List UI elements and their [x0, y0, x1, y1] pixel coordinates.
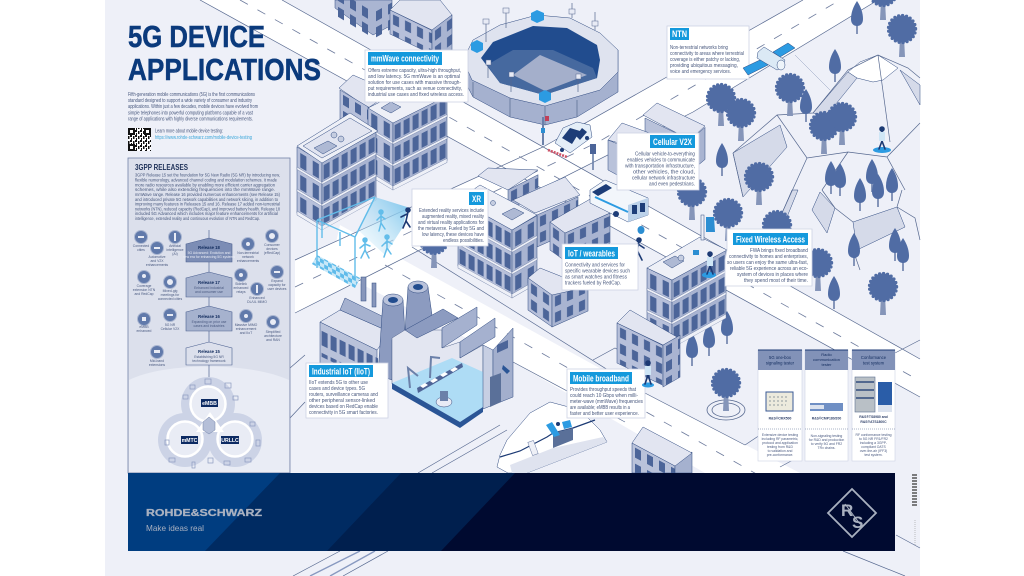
release feature icons: 5G NR: [165, 323, 176, 327]
release 15: Release 15: [198, 349, 220, 354]
text: Mobile broadband description: are available; eMBB results in a: [570, 405, 630, 411]
heading: XR: XR: [472, 194, 481, 204]
heading: mmWave connectivity: mmWave connectivity: [371, 54, 439, 64]
release 15: [186, 342, 232, 365]
release feature icons: Consumer: [264, 243, 281, 247]
heading: 3GPP releases: 3GPP RELEASES: [135, 163, 189, 172]
text: mmWave description: put requirements, such as venue connectivity,: [368, 86, 462, 92]
release feature icons: extensions: [149, 363, 165, 367]
release 18: Release 18: [198, 245, 220, 250]
release feature icons: enhanced: [234, 286, 249, 290]
text: XR description: and virtual reality applications for: [418, 220, 484, 226]
XR scene: [312, 197, 410, 288]
text: IIoT description: other peripheral sensor-linked: [309, 398, 375, 404]
release feature icons: Mid-band: [150, 359, 164, 363]
release 17: [186, 272, 232, 297]
release feature icons: and IIoT: [240, 331, 252, 335]
release feature icons: network: [242, 255, 254, 259]
release 15: Establishing 5G NR: [194, 355, 224, 359]
barcode: [912, 475, 917, 545]
release feature icons: Massive MIMO: [235, 323, 258, 327]
heading: NTN: NTN: [672, 29, 687, 39]
release 15: technology framework: [192, 359, 226, 363]
text: IIoT description: cases and device types. 5G: [309, 386, 365, 392]
column: conformance test system: over-the-air (IFF3): [860, 449, 887, 453]
mountains: [733, 55, 920, 330]
label: URLLC: URLLC: [221, 438, 239, 444]
text: FWA description: so users can enjoy the same ultra-fast,: [727, 260, 808, 266]
banner: [128, 473, 895, 551]
logo: [828, 489, 876, 537]
text: mmWave description: industrial use cases and fixed wireless access.: [368, 92, 464, 98]
release feature icons: Artificial: [169, 244, 181, 248]
release feature icons: user devices: [267, 287, 287, 291]
column: radio communication tester: R&S®CMP180/200: [812, 416, 841, 420]
wireless antenna and people: [630, 127, 891, 278]
text: releases overview: schemes, while also extending frequencies into the mmWave range.: [135, 187, 275, 193]
text: Cellular V2X description: [625, 152, 695, 188]
text: FWA description: FWA brings fixed broadband: [750, 248, 808, 254]
text: NTN description: coverage is either patchy or lacking,: [670, 57, 740, 63]
release feature icons: enhanced: [137, 329, 152, 333]
release 18: new era for enhancing 5G systems: [183, 255, 235, 259]
text: releases overview: 3GPP Release 15 set the foundation for 5G New Radio (5G NR) by introducing new,: [135, 172, 280, 178]
release feature icons: and RedCap: [134, 292, 154, 296]
heading: Industrial IoT: Industrial IoT (IIoT): [312, 366, 370, 376]
release feature icons: Mixed-gig: [163, 289, 177, 293]
callout: NTN: [667, 26, 749, 79]
column: radio communication tester: to verify 5G and FR2: [811, 442, 842, 446]
column: conformance test system: Conformance: [861, 355, 887, 360]
text: FWA description: they spend most of their time.: [744, 278, 808, 284]
column: conformance test system: R&S®ATS1800C: [860, 420, 887, 424]
release feature icons: extension NTN: [133, 288, 156, 292]
callout: Cellular V2X: [617, 133, 699, 190]
text: Mobile broadband description: could reach 10 Gbps when milli-: [570, 393, 638, 399]
label: eMBB: eMBB: [202, 401, 217, 407]
callout: XR: [412, 189, 488, 246]
text: IoT description: specific wearable devices such: [565, 268, 630, 274]
release feature icons: Expand: [271, 279, 283, 283]
release feature icons: relays: [236, 290, 246, 294]
link text: Learn more about mobile device testing:: [155, 128, 223, 134]
text: releases overview: improving many features in Releases 15 and 16. Release 17 added non-terrestrial: [135, 202, 280, 208]
text: Cellular V2X description: cellular network infrastructure: [632, 176, 695, 182]
text: releases overview: and introduced private 5G network capabilities and network slicing, in addition to: [135, 197, 278, 203]
text: NTN description: voice and emergency services.: [670, 69, 731, 75]
text: Cellular V2X description: enables vehicles to communicate: [627, 158, 695, 164]
release feature icons: Cellular V2X: [161, 327, 180, 331]
text: releases overview: included 5G Advanced which includes major feature enhancements for artificial: [135, 211, 278, 217]
text: IIoT description: connectivity in 5G smart factories.: [309, 410, 378, 416]
column: radio communication tester: communication: [813, 357, 840, 362]
column: conformance test system: [852, 350, 895, 461]
factory: [320, 277, 513, 428]
text: mmWave description: and low latency. 5G mmWave is an optimal: [368, 74, 460, 80]
text: releases overview: intelligence, extended reality and continuous evolution of NTN and RedCap.: [135, 216, 260, 222]
text: IoT description: Connectivity and services for: [565, 262, 625, 268]
text: Mobile broadband description: meter-wave (mmWave) frequencies: [570, 399, 643, 405]
release feature icons: architecture: [264, 334, 282, 338]
release 17: Enhanced industrial: [194, 286, 224, 290]
text: mmWave description: [368, 68, 464, 98]
car and traffic lights: [541, 116, 596, 170]
release feature icons: (eRedCap): [264, 251, 280, 255]
text: FWA description: system of devices in places where: [737, 272, 808, 278]
satellite: [743, 43, 830, 90]
release 16: cases and industries: [194, 324, 225, 328]
high speed train: [293, 402, 607, 576]
column: 5G one-box signaling tester: protocol and application: [762, 441, 798, 445]
tagline: Make ideas real: [146, 523, 204, 533]
release 18: [183, 238, 235, 262]
column: conformance test system: test system: [863, 360, 885, 366]
callout: Industrial IoT: [306, 363, 388, 418]
column: 5G one-box signaling tester: to validation and: [768, 449, 792, 453]
text: mmWave description: solution for use cases with massive through-: [368, 80, 461, 86]
logo: R: [841, 501, 853, 520]
column: conformance test system: to 5G NR FR1/FR2: [859, 437, 888, 441]
link text: https://www.rohde-schwarz.com/mobile-device-testing: [155, 135, 252, 141]
release feature icons: Simplified: [266, 330, 280, 334]
logo: S: [852, 513, 863, 532]
text: Cellular V2X description: other vehicles, the cloud,: [633, 170, 695, 176]
column: radio communication tester: Non-signaling testing: [811, 434, 842, 438]
release 18: 5G Advanced: Evolution and: [188, 251, 231, 255]
title: [128, 19, 321, 87]
diagram: eMBB mMTC URLLC: [158, 377, 262, 468]
column: conformance test system: compliant OATS: [861, 445, 886, 449]
release feature icons: DL/UL MIMO: [247, 300, 267, 304]
callout: IoT / wearables: [562, 244, 638, 290]
panel: test instruments: [758, 350, 895, 461]
text: FWA description: connectivity to homes and enterprises,: [729, 254, 808, 260]
column: 5G one-box signaling tester: signaling tester: [766, 360, 795, 366]
column: 5G one-box signaling tester: pre-conformance.: [767, 453, 793, 457]
release feature icons: devices: [266, 247, 278, 251]
text: XR description: Extended reality services include: [419, 208, 484, 214]
text: IIoT description: [309, 380, 378, 416]
intro text: applications. Within just a few decades, mobile devices have evolved from: [128, 104, 258, 110]
trees: [420, 0, 916, 420]
release feature icons: Connected: [133, 244, 149, 248]
heading: Mobile broadband: Mobile broadband: [573, 374, 629, 384]
text: NTN description: Non-terrestrial networks bring: [670, 45, 728, 51]
column: 5G one-box signaling tester: 5G one-box: [769, 355, 792, 360]
poster background: [105, 0, 920, 576]
column: conformance test system: R&S®TS8980 and: [859, 415, 888, 419]
release feature icons: connected cities: [158, 297, 182, 301]
heading: IoT / wearables: IoT / wearables: [568, 248, 615, 258]
text: XR description: augmented reality, mixed reality: [422, 214, 484, 220]
release feature icons: [133, 230, 287, 367]
column: radio communication tester: tester: [821, 362, 832, 367]
release feature icons: enhancements: [237, 259, 259, 263]
intro text: [128, 92, 258, 122]
text: IoT description: [565, 262, 630, 286]
release 17: and consumer use: [195, 290, 223, 294]
text: releases overview: [135, 172, 280, 222]
text: NTN description: connectivity to areas where terrestrial: [670, 51, 744, 57]
building group left: [297, 75, 447, 230]
text: IoT description: trackers fueled by RedCap.: [565, 280, 621, 286]
text: IIoT description: devices based on RedCap enable: [309, 404, 378, 410]
text: releases overview: networks (NTN), reduced capacity (RedCap), and improved battery health. Release 18: [135, 206, 280, 212]
column: 5G one-box signaling tester: including RF parametric,: [762, 437, 798, 441]
release feature icons: capacity for: [268, 283, 287, 287]
text: XR description: low latency, these devices have: [422, 232, 484, 238]
intro text: Fifth-generation mobile communications (5G) is the first communications: [128, 92, 255, 98]
column: radio communication tester: Radio: [821, 352, 832, 357]
callout: Fixed Wireless Access: [725, 229, 812, 286]
text: Cellular V2X description: with transportation infrastructure,: [625, 164, 695, 170]
brand name: ROHDE&SCHWARZ: [146, 507, 263, 519]
link text: [155, 128, 252, 141]
intro text: standard designed to support a wide variety of consumer and industry: [128, 98, 252, 104]
column: 5G one-box signaling tester: Extensive device testing: [762, 433, 798, 437]
release 16: Release 16: [198, 314, 220, 319]
text: Mobile broadband description: faster and better user experience.: [570, 411, 639, 417]
release feature icons: enhancements: [146, 263, 168, 267]
release feature icons: meetings for: [161, 293, 180, 297]
QR code: [128, 128, 151, 151]
text: IIoT description: IIoT extends 5G to other use: [309, 380, 368, 386]
release feature icons: eMBB: [139, 325, 149, 329]
heading: Cellular V2X: Cellular V2X: [653, 137, 692, 147]
text: NTN description: [670, 45, 744, 75]
text: Cellular V2X description: and even pedestrians.: [649, 182, 695, 188]
text: NTN description: providing ubiquitous messaging,: [670, 63, 738, 69]
text: IoT description: as smart watches and fitness: [565, 274, 627, 280]
release feature icons: and V2X: [150, 259, 164, 263]
release feature icons: Sidelink: [235, 282, 247, 286]
text: XR description: endless possibilities.: [443, 238, 484, 244]
release 16: [186, 306, 232, 331]
text: releases overview: mmWave range. Release 16 provided numerous enhancements (see Release 15): [135, 192, 280, 198]
intro text: range of applications with highly diverse communications requirements.: [128, 116, 253, 122]
release feature icons: and RAN: [266, 338, 280, 342]
text: releases overview: more radio resources available by enabling more efficient carrier aggregation: [135, 182, 275, 188]
text: Mobile broadband description: [570, 387, 643, 417]
text: Cellular V2X description: Cellular vehicle-to-everything: [635, 152, 695, 158]
text: XR description: the metaverse. Fueled by 5G and: [418, 226, 484, 232]
right houses and FWA building: [608, 103, 727, 496]
column: conformance test system: test system.: [864, 453, 883, 457]
title: APPLICATIONS: [128, 52, 321, 87]
column: 5G one-box signaling tester: [758, 350, 802, 461]
release feature icons: Automotive: [149, 255, 166, 259]
text: Mobile broadband description: Provides throughput speeds that: [570, 387, 637, 393]
intro text: simple telephones into powerful computing platforms capable of a vast: [128, 110, 253, 116]
release 16: Expanding on prior use: [192, 320, 227, 324]
label: mMTC: mMTC: [182, 438, 198, 444]
column: 5G one-box signaling tester: R&S®CMX500: [769, 416, 792, 420]
callout: Mobile broadband: [567, 369, 645, 418]
column: radio communication tester: TRx chains.: [818, 446, 836, 450]
column: conformance test system: including a 3GPP-: [860, 441, 887, 445]
release 17: Release 17: [198, 280, 220, 285]
release feature icons: cities: [137, 248, 145, 252]
release feature icons: intelligence: [167, 248, 184, 252]
text: FWA description: reliable 5G experience across an eco-: [730, 266, 808, 272]
column: radio communication tester: for R&D and production: [809, 438, 844, 442]
text: mmWave description: Offers extreme capacity, ultra-high throughput,: [368, 68, 461, 74]
column: conformance test system: RF conformance testing: [856, 433, 892, 437]
release feature icons: Coverage: [137, 284, 151, 288]
central buildings: [458, 168, 610, 327]
release feature icons: Enhanced: [249, 296, 265, 300]
roads: [200, 0, 920, 576]
release feature icons: Non-terrestrial: [237, 251, 259, 255]
text: releases overview: flexible numerology, advanced channel coding and modulation schemes. It made: [135, 178, 277, 184]
panel: 3GPP releases: [128, 158, 290, 473]
column: 5G one-box signaling tester: testing from R&D: [767, 445, 793, 449]
release feature icons: (AI): [172, 252, 178, 256]
ambulance: [590, 180, 648, 222]
heading: Fixed Wireless Access: Fixed Wireless Access: [736, 234, 805, 244]
stadium: [463, 3, 618, 125]
callout: mmWave connectivity: [365, 50, 468, 102]
title: 5G DEVICE: [128, 19, 265, 54]
column: radio communication tester: [805, 350, 848, 461]
text: FWA description: [727, 248, 808, 284]
release feature icons: enhancement: [236, 327, 256, 331]
text: IIoT description: routers, surveillance cameras and: [309, 392, 378, 398]
person with smartphone: [642, 361, 654, 388]
top houses: [335, 0, 452, 66]
text: XR description: [418, 208, 484, 244]
